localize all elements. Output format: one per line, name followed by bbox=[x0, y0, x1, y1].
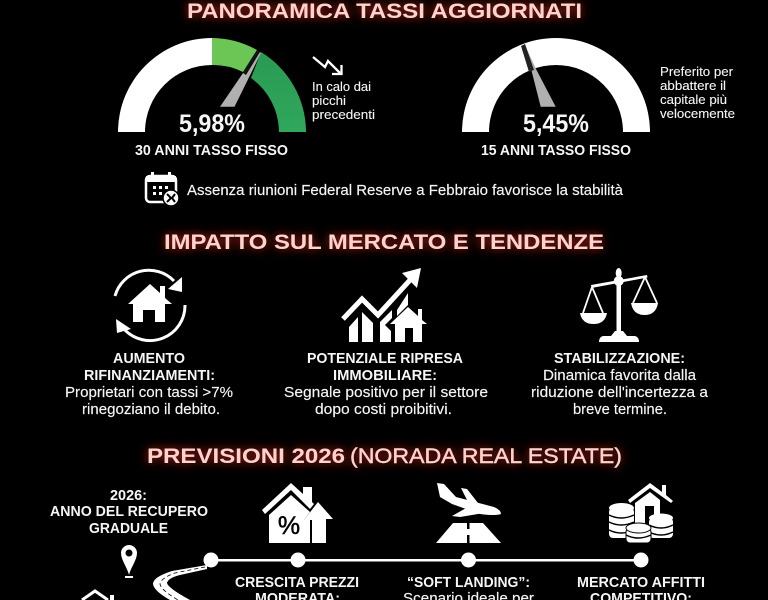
text: potenziale ripresa: IMMOBILIARE: bbox=[333, 367, 437, 384]
text: crescita prezzi: CRESCITA PREZZI bbox=[235, 574, 359, 591]
text: potenziale ripresa: POTENZIALE RIPRESA bbox=[307, 350, 463, 367]
text: aumento rifinanziamenti: rinegoziano il debito. bbox=[82, 401, 220, 418]
note: in calo: picchi bbox=[312, 93, 346, 108]
federal reserve note: Assenza riunioni Federal Reserve a Febbraio favorisce la stabilità bbox=[187, 182, 624, 199]
text: stabilizzazione: STABILIZZAZIONE: bbox=[554, 350, 685, 367]
text: stabilizzazione: riduzione dell'incertezza a bbox=[531, 384, 709, 401]
text: potenziale ripresa: dopo costi proibitivi. bbox=[315, 401, 452, 418]
text: stabilizzazione: breve termine. bbox=[573, 401, 667, 418]
text: aumento rifinanziamenti: RIFINANZIAMENTI: bbox=[84, 367, 215, 384]
text: stabilizzazione bbox=[531, 350, 709, 418]
note: preferito: abbattere il bbox=[660, 78, 726, 93]
icon: house and coins bbox=[609, 483, 673, 543]
text: anno del recupero bbox=[50, 487, 208, 537]
text: mercato affitti: MERCATO AFFITTI bbox=[577, 574, 705, 591]
note: preferito bbox=[660, 64, 735, 121]
icon: winding road bbox=[153, 565, 207, 600]
icon: house with percent: % bbox=[278, 512, 300, 540]
icon: bottom house bbox=[82, 591, 114, 600]
gauge label: 30 ANNI TASSO FISSO bbox=[135, 142, 288, 159]
icon: falling arrow bbox=[313, 57, 342, 74]
gauge: 15 anni bbox=[462, 38, 650, 159]
text: crescita prezzi bbox=[235, 574, 359, 600]
icon: calendar bbox=[146, 172, 179, 206]
text: soft landing: “SOFT LANDING”: bbox=[407, 574, 530, 591]
text: aumento rifinanziamenti bbox=[65, 350, 233, 418]
gauge value: 5,45% bbox=[523, 110, 589, 138]
title: previsioni: (NORADA REAL ESTATE) bbox=[350, 445, 622, 468]
note: in calo: In calo dai bbox=[312, 79, 371, 94]
text: potenziale ripresa: Segnale positivo per il settore bbox=[284, 384, 488, 401]
icon: house with percent bbox=[262, 483, 333, 543]
text: stabilizzazione: Dinamica favorita dalla bbox=[543, 367, 697, 384]
note: in calo: precedenti bbox=[312, 107, 375, 122]
text: aumento rifinanziamenti: Proprietari con tassi >7% bbox=[65, 384, 233, 401]
text: anno del recupero: GRADUALE bbox=[89, 520, 168, 537]
icon: map pin bbox=[121, 545, 137, 578]
gauge label: 15 ANNI TASSO FISSO bbox=[481, 142, 631, 159]
text: aumento rifinanziamenti: AUMENTO bbox=[113, 350, 185, 367]
note: preferito: velocemente bbox=[660, 106, 735, 121]
title: impatto: IMPATTO SUL MERCATO E TENDENZE bbox=[164, 231, 604, 254]
timeline bbox=[204, 552, 648, 568]
gauge: 30 anni bbox=[118, 38, 306, 159]
title: panoramica tassi: PANORAMICA TASSI AGGIORNATI bbox=[187, 0, 582, 23]
title: previsioni bbox=[147, 445, 622, 468]
gauge value: 5,98% bbox=[179, 110, 245, 138]
text: anno del recupero: 2026: bbox=[110, 487, 147, 504]
text: anno del recupero: ANNO DEL RECUPERO bbox=[50, 503, 208, 520]
note: in calo bbox=[312, 79, 375, 122]
text: soft landing bbox=[403, 574, 534, 600]
note: preferito: Preferito per bbox=[660, 64, 734, 79]
title: previsioni: PREVISIONI 2026 bbox=[147, 445, 345, 468]
icon: plane and runway bbox=[436, 483, 501, 543]
text: mercato affitti bbox=[577, 574, 705, 600]
icon: growth chart with houses bbox=[343, 268, 427, 342]
icon: refinancing house bbox=[115, 270, 185, 341]
icon: balance scale bbox=[580, 268, 658, 342]
note: preferito: capitale più bbox=[660, 92, 727, 107]
text: potenziale ripresa bbox=[284, 350, 488, 418]
